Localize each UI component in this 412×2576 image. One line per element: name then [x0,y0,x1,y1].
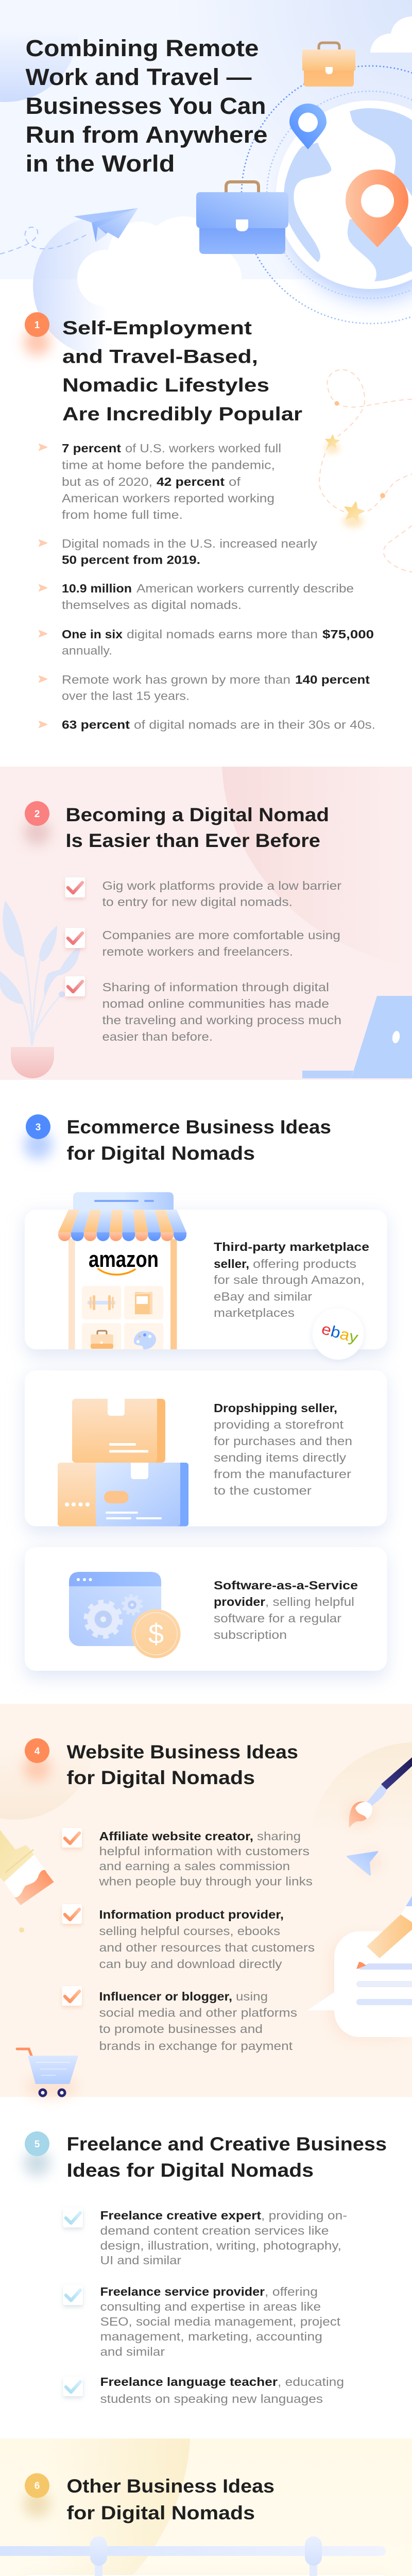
checklist item: information product provider: Information product provider, [99,1908,284,1921]
checklist item: influencer or blogger: social media and other platforms [99,2006,297,2020]
checklist item: companies: Companies are more comfortable using [102,928,340,942]
icon: large gear [85,1602,121,1637]
checklist item: affiliate website creator: when people buy through your links [98,1874,313,1888]
description [214,1240,369,1319]
card: software-as-a-service provider [25,1547,387,1678]
decoration: dashed star trail [319,370,412,572]
checklist item: companies: remote workers and freelancers. [102,945,293,958]
checklist item: freelance creative expert: design, illustration, writing, photography, [100,2239,341,2252]
panel: section 3 ecommerce business ideas [24,1114,387,1678]
checklist item: sharing of information: nomad online communities has made [102,997,329,1010]
description: eBay and similar [214,1290,312,1303]
checklist item: freelance service provider: SEO, social media management, project [100,2315,341,2328]
heading: for Digital Nomads [67,2502,255,2523]
heading [67,2476,274,2523]
number badge 6: 6 [35,2481,40,2492]
icon: book [135,1292,152,1314]
heading [62,317,302,425]
checklist item: sharing of information [65,976,341,1043]
heading: Nomadic Lifestyles [62,375,269,396]
heading: for Digital Nomads [67,1143,255,1164]
card: third-party marketplace seller [25,1192,387,1362]
stat: 10.9 million: American workers currently describe [136,582,354,595]
description: providing a storefront [214,1418,344,1431]
illustration: shopping cart [17,2049,78,2099]
checklist item: freelance service provider: and similar [100,2345,165,2359]
checklist item: freelance creative expert [63,2208,347,2267]
description: offering products [253,1257,356,1270]
description: software for a regular [214,1612,341,1625]
heading: Ecommerce Business Ideas [67,1116,331,1138]
heading: Freelance and Creative Business [67,2133,387,2155]
stat: 50 percent from 2019: Digital nomads in the U.S. increased nearly [62,537,318,550]
heading [67,2133,387,2181]
stat: one in six: digital nomads earns more than [127,628,318,641]
checklist item: freelance service provider [63,2285,341,2359]
panel: section 1 self-employment statistics [24,312,412,732]
number badge 2 [24,801,50,845]
title: Work and Travel — [26,64,251,90]
number badge 1: 1 [35,320,40,331]
stat: one in six: $75,000 [322,628,374,641]
cloud: top right [370,16,412,53]
checklist item: freelance creative expert: , providing on- [261,2209,347,2222]
stat: one in six: annually. [62,644,112,657]
checklist item: freelance creative expert: demand content creation services like [100,2224,329,2237]
checklist item: freelance service provider: management, marketing, accounting [100,2330,322,2343]
heading: and Travel-Based, [62,346,258,367]
checklist item: freelance creative expert: Freelance creative expert [100,2209,261,2222]
checklist item: affiliate website creator [62,1828,313,1888]
checklist item: information product provider: and other resources that customers [99,1941,315,1954]
stat: 50 percent from 2019 [39,537,318,567]
stat: 7 percent and 42 percent [39,442,281,521]
checklist item: freelance language teacher [63,2375,344,2405]
stat: 63 percent [39,718,375,732]
icon: paper plane with dashed trail [0,208,138,254]
description: Third-party marketplace [214,1240,369,1253]
stat: 10.9 million: themselves as digital nomads. [62,598,242,612]
stat: one in six: One in six [62,628,123,641]
description: to the customer [214,1484,312,1497]
checklist item: sharing of information: Sharing of information through digital [102,980,329,994]
checklist item: information product provider: can buy and download directly [99,1957,282,1971]
description: subscription [214,1628,287,1641]
checklist item: gig work platforms: to entry for new digital nomads. [102,895,293,909]
checklist item: influencer or blogger: to promote businesses and [99,2022,263,2036]
heading: Becoming a Digital Nomad [66,804,329,825]
description: seller, [214,1257,249,1270]
heading: for Digital Nomads [67,1767,255,1788]
description: from the manufacturer [214,1467,351,1481]
heading [67,1116,331,1164]
illustration: chat bubble with pencil [307,1896,412,2040]
illustration: potted plant [0,901,80,1078]
illustration: paintbrush left [0,1830,54,1933]
hanging clips [90,2536,322,2576]
panel: section 2 becoming a digital nomad [0,767,412,1080]
heading: Other Business Ideas [67,2476,274,2497]
stat: 140 percent: over the last 15 years. [62,689,190,703]
description: marketplaces [214,1306,295,1319]
title: in the World [26,150,175,177]
checklist item: affiliate website creator: helpful information with customers [99,1844,310,1858]
heading: Self-Employment [62,317,252,338]
stat: 7 percent and 42 percent: but as of 2020, [62,475,152,488]
icon: palette [134,1331,156,1349]
stat: 7 percent and 42 percent: of U.S. workers worked full [125,442,281,455]
heading: Website Business Ideas [67,1741,298,1762]
illustration: storefront with amazon logo: amazon [89,1247,159,1272]
stat: 7 percent and 42 percent: American workers reported working [62,492,274,505]
illustration: storefront with amazon logo [58,1192,186,1349]
description: for purchases and then [214,1434,352,1448]
stat: 7 percent and 42 percent: 7 percent [62,442,121,455]
description: , selling helpful [265,1595,354,1608]
description [214,1579,358,1641]
description: Dropshipping seller, [214,1401,337,1415]
number badge 3 [24,1114,53,1159]
stat: 140 percent: 140 percent [295,673,370,686]
title: Businesses You Can [26,93,266,119]
icon: dollar coin [132,1609,180,1658]
stat: 50 percent from 2019: 50 percent from 2019. [62,553,200,567]
number badge 6 [24,2473,50,2517]
checklist item: influencer or blogger [62,1986,297,2053]
cloud and arc at bottom of hero [33,216,242,356]
panel: section 5 freelance and creative business ideas [24,2131,387,2405]
stat: 7 percent and 42 percent: time at home before the pandemic, [62,459,275,472]
checklist item: freelance service provider: Freelance service provider [100,2285,265,2298]
heading: Are Incredibly Popular [62,403,302,425]
checklist item: influencer or blogger: using [236,1990,268,2003]
heading [67,1741,298,1788]
heading: Is Easier than Ever Before [66,830,320,851]
checklist item: information product provider [62,1904,315,1971]
globe with land masses and dotted orbits [242,66,412,324]
number badge 3: 3 [36,1122,41,1133]
description: provider [214,1595,265,1608]
stat: 10.9 million [39,582,354,612]
title [26,35,268,177]
icon: orange location pin [346,170,408,247]
heading [66,804,329,851]
panel: section 6 other business ideas [0,2438,412,2576]
icon: small briefcase [91,1331,113,1349]
checklist item: influencer or blogger: brands in exchange for payment [99,2039,293,2053]
icon: dollar coin: $ [148,1619,164,1650]
checklist item: freelance language teacher: Freelance language teacher [100,2375,278,2388]
checklist item: affiliate website creator: Affiliate website creator, [99,1829,253,1843]
title: Run from Anywhere [26,122,268,148]
icon: ebay logo badge [312,1308,364,1362]
hanging rail [0,2546,386,2556]
checklist item: sharing of information: easier than before. [102,1030,213,1043]
illustration: stacked boxes [58,1399,188,1526]
checklist item: influencer or blogger: Influencer or blogger, [99,1990,232,2003]
illustration: software window with gears and coin [69,1572,180,1658]
description: sending items directly [214,1451,347,1464]
checklist item: freelance language teacher: students on speaking new languages [100,2392,323,2405]
panel: hero header [0,0,412,356]
icon: orange briefcase [302,43,355,87]
stat: 140 percent [39,673,370,703]
icon: small gear [123,1596,142,1614]
number badge 4: 4 [35,1746,40,1757]
title: Combining Remote [26,35,259,61]
number badge 1 [24,312,50,355]
stat: 63 percent: of digital nomads are in their 30s or 40s. [134,718,375,732]
number badge 5: 5 [35,2139,40,2150]
checklist item: companies [65,928,340,958]
checklist item: affiliate website creator: sharing [257,1829,301,1843]
description [214,1401,352,1497]
checklist item: information product provider: selling helpful courses, ebooks [99,1924,280,1938]
checklist item: sharing of information: the traveling and working process much [102,1013,341,1027]
description: for sale through Amazon, [214,1273,365,1286]
checklist item: affiliate website creator: and earning a sales commission [99,1859,290,1873]
description: Software-as-a-Service [214,1579,358,1592]
icon: navigation arrow [347,1851,381,1876]
illustration: paintbrush top right [345,1757,412,1828]
card: dropshipping seller [25,1370,387,1533]
checklist item: freelance language teacher: , educating [278,2375,344,2388]
number badge 4 [24,1738,50,1782]
card: other business ideas [26,2575,386,2576]
illustration: laptop [302,996,412,1078]
checklist item: gig work platforms: Gig work platforms provide a low barrier [102,879,341,892]
stat: 7 percent and 42 percent: of [229,475,241,488]
number badge 2: 2 [35,809,40,820]
checklist item: freelance service provider: consulting and expertise in areas like [100,2300,321,2313]
heading: Ideas for Digital Nomads [67,2160,314,2181]
checklist item: gig work platforms [65,877,341,909]
stat: one in six [39,628,374,657]
stat: 10.9 million: 10.9 million [62,582,132,595]
stat: 7 percent and 42 percent: 42 percent [157,475,225,488]
stat: 63 percent: 63 percent [62,718,130,732]
checklist item: freelance creative expert: UI and similar [100,2253,181,2267]
icon: blue location pin [289,104,327,149]
panel: section 4 website business ideas [0,1663,412,2099]
icon: blue briefcase [196,182,288,254]
checklist item: freelance service provider: , offering [265,2285,318,2298]
number badge 5 [24,2131,50,2176]
stat: 140 percent: Remote work has grown by more than [62,673,290,686]
stat: 7 percent and 42 percent: from home full time. [62,508,183,521]
icon: ebay logo badge: ebay [320,1320,360,1347]
icon: dumbbell [88,1295,115,1310]
